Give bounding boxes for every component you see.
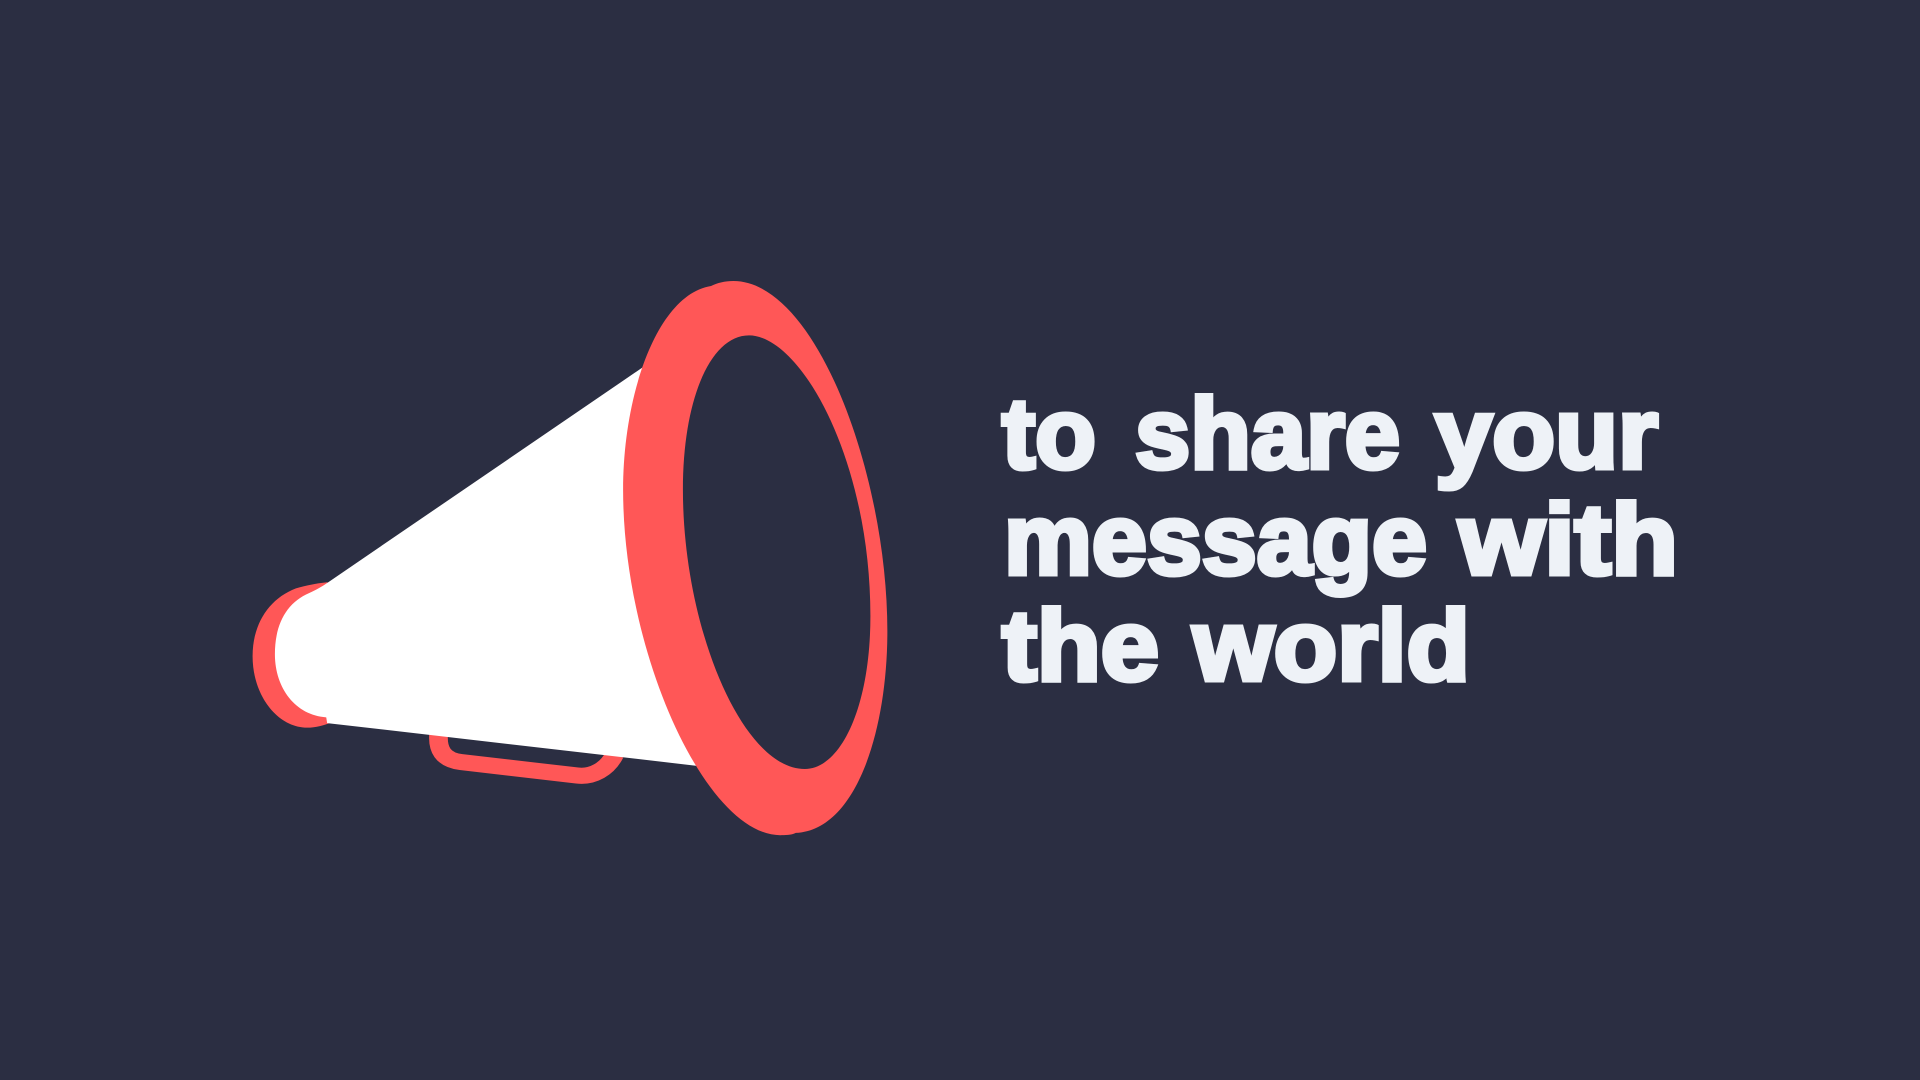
- icon: megaphone: [253, 281, 887, 835]
- headline text: to: [1002, 378, 1096, 490]
- headline text: your: [1435, 378, 1658, 490]
- megaphone white cone: [275, 366, 704, 767]
- megaphone mouthpiece: [253, 582, 354, 728]
- headline text: share: [1135, 378, 1400, 490]
- headline text: the: [1002, 590, 1159, 702]
- headline text: [1002, 378, 1678, 702]
- headline text: world: [1192, 590, 1470, 702]
- headline text: with: [1458, 484, 1678, 596]
- megaphone handle: [438, 733, 615, 776]
- headline text: message: [1004, 484, 1427, 596]
- megaphone bell ring: [623, 281, 887, 835]
